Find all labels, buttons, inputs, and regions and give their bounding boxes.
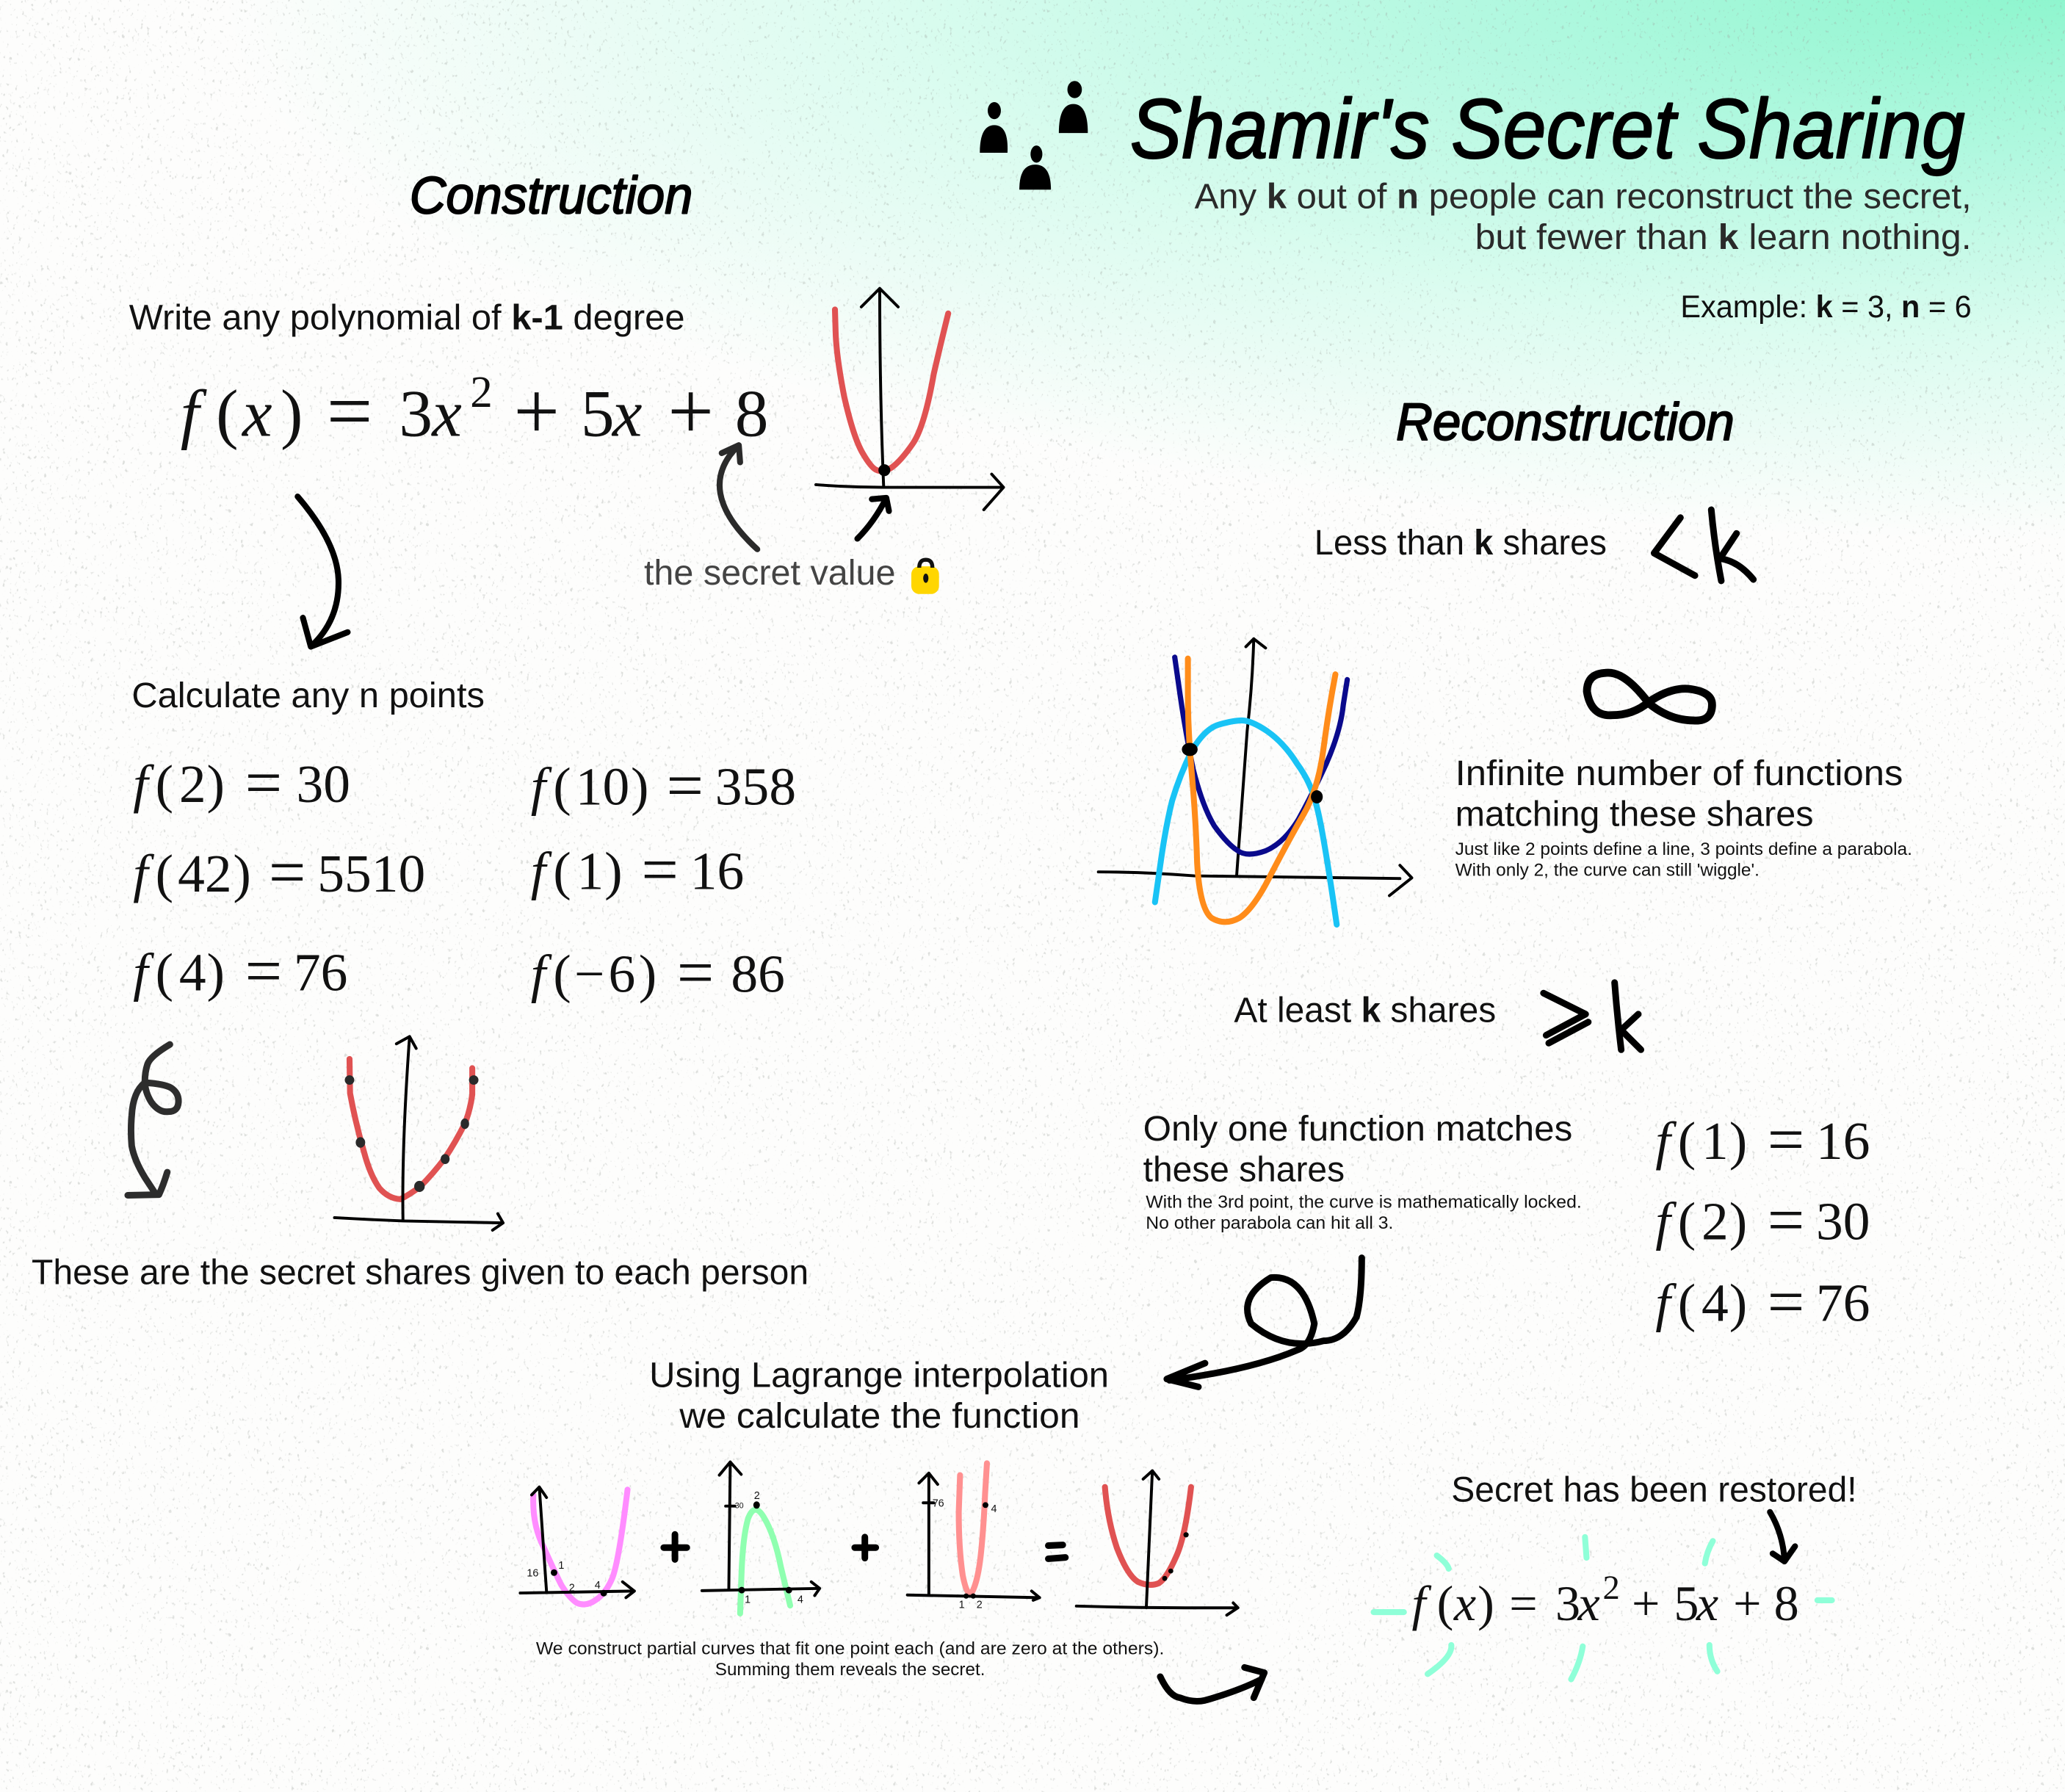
chart: partial curve one: 1 bbox=[558, 1560, 564, 1572]
chart: partial curve two bbox=[702, 1462, 820, 1614]
heading: reconstruction: Reconstruction bbox=[1396, 393, 1735, 452]
formula: polynomial: ) bbox=[281, 376, 303, 451]
subtitle: but fewer than k learn nothing. bbox=[1475, 217, 1972, 257]
panel: construction bbox=[32, 167, 1004, 1293]
symbol: less than k bbox=[1654, 510, 1754, 581]
formulas: points: 86 bbox=[731, 943, 785, 1003]
decoration: mint sparkle dashes bbox=[1373, 1537, 1832, 1680]
text: less than k shares: Less than k shares bbox=[1314, 523, 1607, 563]
formula: restored polynomial: x bbox=[1577, 1575, 1600, 1631]
formulas: three shares: 1 bbox=[1701, 1110, 1729, 1171]
formula: polynomial: 3 bbox=[399, 376, 433, 451]
formulas: points: f bbox=[133, 942, 154, 1002]
formulas: three shares: ( bbox=[1678, 1273, 1696, 1333]
formulas: three shares: 2 bbox=[1701, 1191, 1729, 1251]
formula: restored polynomial: ( bbox=[1437, 1575, 1453, 1631]
chart: partial curve three: 1 bbox=[959, 1600, 965, 1611]
formula: restored polynomial: 5 bbox=[1674, 1575, 1699, 1631]
note: partial curves bbox=[536, 1639, 1164, 1680]
formulas: points: ( bbox=[156, 754, 173, 814]
formulas: points: f bbox=[531, 943, 552, 1003]
formula: restored polynomial: x bbox=[1696, 1575, 1718, 1631]
formulas: points: 2 bbox=[179, 754, 206, 814]
formulas: points bbox=[133, 747, 796, 1009]
formulas: points: ( bbox=[156, 942, 173, 1002]
formulas: three shares: = bbox=[1768, 1104, 1804, 1177]
chart: partial curve three bbox=[908, 1463, 1040, 1611]
note: partial curves: We construct partial curves that fit one point each (and are zero at the others). bbox=[536, 1639, 1164, 1658]
chart: partial curve one bbox=[520, 1487, 634, 1605]
arrow: to secret value on chart bbox=[857, 498, 889, 538]
formulas: points: 76 bbox=[294, 942, 347, 1002]
text: one function bbox=[1143, 1109, 1572, 1190]
formula: restored polynomial: + bbox=[1733, 1575, 1761, 1631]
formulas: points: ) bbox=[604, 841, 623, 901]
formula: polynomial: x bbox=[241, 376, 272, 451]
formulas: three shares: 16 bbox=[1816, 1110, 1870, 1171]
formulas: points: f bbox=[133, 754, 154, 814]
formula: restored polynomial: 3 bbox=[1555, 1575, 1580, 1631]
chart: partial curve two: 30 bbox=[735, 1501, 744, 1510]
formulas: points: = bbox=[269, 837, 305, 909]
formula: polynomial: x bbox=[430, 376, 462, 451]
formulas: points: f bbox=[531, 841, 552, 901]
note: wiggle bbox=[1455, 839, 1912, 881]
text: one function: these shares bbox=[1143, 1150, 1345, 1190]
chart: many parabolas through two points bbox=[1099, 639, 1411, 925]
formula: polynomial: f bbox=[181, 376, 207, 451]
formulas: three shares: f bbox=[1655, 1191, 1677, 1251]
text: infinite functions: Infinite number of functions bbox=[1455, 754, 1903, 793]
chart: partial curve two: 4 bbox=[798, 1594, 803, 1606]
chart: parabola with secret value bbox=[816, 289, 1004, 510]
formula: polynomial: 5 bbox=[581, 376, 615, 451]
chart: partial curve three: 76 bbox=[933, 1498, 944, 1510]
formulas: points: ) bbox=[639, 943, 657, 1003]
label: the secret value: the secret value bbox=[644, 553, 895, 593]
formula: restored polynomial: 8 bbox=[1774, 1575, 1799, 1631]
chart: partial curve two: 2 bbox=[754, 1490, 760, 1502]
text: secret restored: Secret has been restored! bbox=[1451, 1470, 1857, 1509]
formula: polynomial: ( bbox=[216, 376, 239, 451]
formulas: points: 6 bbox=[609, 943, 635, 1003]
formula: polynomial: x bbox=[611, 376, 643, 451]
formulas: three shares: 30 bbox=[1816, 1191, 1870, 1251]
text: calculate n points: Calculate any n points bbox=[131, 676, 485, 715]
panel: reconstruction bbox=[1099, 393, 1912, 1387]
chart: partial curve one: 4 bbox=[595, 1580, 601, 1592]
symbol: equals bbox=[1049, 1545, 1066, 1558]
formula: restored polynomial: 2 bbox=[1603, 1569, 1620, 1607]
formulas: points: = bbox=[677, 936, 714, 1009]
subtitle: Any k out of n people can reconstruct the secret, bbox=[1195, 176, 1972, 216]
formulas: three shares: f bbox=[1655, 1273, 1677, 1333]
formulas: points: = bbox=[245, 935, 282, 1008]
formulas: points: ( bbox=[553, 943, 571, 1003]
formula: restored polynomial: ) bbox=[1478, 1575, 1494, 1631]
formulas: points: = bbox=[641, 834, 679, 906]
formula: polynomial: + bbox=[668, 366, 714, 457]
panel: secret restored bbox=[1373, 1470, 1857, 1680]
arrow: loop to lagrange bbox=[1167, 1258, 1361, 1387]
note: locked curve bbox=[1146, 1193, 1582, 1233]
formulas: points: = bbox=[666, 749, 704, 822]
formulas: points: ) bbox=[207, 942, 225, 1002]
formulas: three shares: = bbox=[1768, 1265, 1804, 1338]
heading: lagrange bbox=[649, 1355, 1109, 1436]
symbol: plus bbox=[664, 1534, 687, 1559]
formulas: three shares: ) bbox=[1729, 1110, 1747, 1171]
formulas: three shares: ) bbox=[1729, 1191, 1747, 1251]
formulas: three shares: ) bbox=[1729, 1273, 1747, 1333]
symbol: at least k bbox=[1544, 983, 1641, 1049]
icon: infinity bbox=[1587, 673, 1712, 720]
formulas: points: ( bbox=[553, 756, 571, 817]
formulas: points: ( bbox=[156, 843, 173, 903]
note: wiggle: Just like 2 points define a line, 3 points define a parabola. bbox=[1455, 839, 1912, 859]
formulas: three shares: = bbox=[1768, 1184, 1804, 1257]
text: secret shares: These are the secret shares given to each person bbox=[32, 1253, 809, 1293]
formulas: three shares bbox=[1655, 1104, 1870, 1338]
text: infinite functions bbox=[1455, 754, 1903, 834]
note: locked curve: No other parabola can hit all 3. bbox=[1146, 1213, 1393, 1233]
formulas: points: ) bbox=[631, 756, 649, 817]
formulas: three shares: 4 bbox=[1701, 1273, 1729, 1333]
formulas: three shares: f bbox=[1655, 1110, 1677, 1171]
formulas: points: 10 bbox=[576, 756, 629, 817]
arrow: down to points bbox=[297, 496, 347, 647]
chart: partial curve three: 2 bbox=[977, 1600, 983, 1611]
formulas: points: 16 bbox=[690, 841, 744, 901]
chart: partial curve two: 1 bbox=[745, 1594, 751, 1606]
chart: summed parabola bbox=[1077, 1471, 1238, 1615]
note: wiggle: With only 2, the curve can still 'wiggle'. bbox=[1455, 861, 1760, 881]
formula: restored polynomial: = bbox=[1509, 1575, 1538, 1631]
formulas: points: 358 bbox=[715, 756, 796, 817]
formulas: points: 30 bbox=[297, 754, 350, 814]
formulas: points: f bbox=[531, 756, 552, 817]
text: write polynomial: Write any polynomial of k-1 degree bbox=[129, 297, 685, 337]
subtitle bbox=[1195, 176, 1972, 257]
arrow: loop down bbox=[128, 1044, 178, 1195]
formulas: points: = bbox=[245, 747, 282, 820]
symbol: plus bbox=[855, 1537, 876, 1558]
chart: partial curve one: 2 bbox=[569, 1582, 575, 1594]
formulas: points: 42 bbox=[178, 843, 232, 903]
example parameters: Example: k = 3, n = 6 bbox=[1680, 289, 1972, 325]
chart: parabola with six points bbox=[335, 1036, 503, 1230]
formulas: points: 1 bbox=[576, 841, 604, 901]
formulas: points: f bbox=[133, 843, 154, 903]
title: Shamir's Secret Sharing bbox=[1130, 82, 1965, 176]
formulas: points: ( bbox=[553, 841, 571, 901]
chart: partial curve one: 16 bbox=[527, 1568, 538, 1580]
formulas: three shares: ( bbox=[1678, 1191, 1696, 1251]
text: infinite functions: matching these shares bbox=[1455, 794, 1813, 834]
note: locked curve: With the 3rd point, the curve is mathematically locked. bbox=[1146, 1193, 1582, 1213]
formula: polynomial: 2 bbox=[470, 368, 493, 417]
text: at least k shares: At least k shares bbox=[1234, 991, 1496, 1030]
formula: restored polynomial: f bbox=[1411, 1575, 1431, 1631]
icon: three people bbox=[980, 81, 1088, 189]
formula: polynomial: = bbox=[327, 366, 372, 457]
formula: polynomial: + bbox=[513, 366, 560, 457]
formulas: points: ) bbox=[207, 754, 225, 814]
formula: restored polynomial: + bbox=[1632, 1575, 1660, 1631]
formulas: points: 5510 bbox=[317, 843, 425, 903]
heading: construction: Construction bbox=[410, 167, 692, 225]
heading: lagrange: we calculate the function bbox=[679, 1396, 1080, 1436]
icon: lock bbox=[911, 560, 939, 594]
note: partial curves: Summing them reveals the secret. bbox=[715, 1660, 985, 1680]
formula: polynomial: 8 bbox=[735, 376, 768, 451]
arrow: to restored secret bbox=[1160, 1667, 1265, 1701]
arrow: to constant bbox=[1770, 1512, 1795, 1561]
formulas: points: 4 bbox=[179, 942, 206, 1002]
formulas: points: ) bbox=[233, 843, 251, 903]
chart: partial curve three: 4 bbox=[991, 1503, 997, 1515]
header bbox=[980, 81, 1972, 325]
formula: restored polynomial: x bbox=[1453, 1575, 1476, 1631]
heading: lagrange: Using Lagrange interpolation bbox=[649, 1355, 1109, 1395]
arrow: to constant term bbox=[720, 445, 757, 549]
formulas: three shares: ( bbox=[1678, 1110, 1696, 1171]
formulas: three shares: 76 bbox=[1816, 1273, 1870, 1333]
text: one function: Only one function matches bbox=[1143, 1109, 1572, 1149]
formulas: points: − bbox=[574, 943, 604, 1003]
panel: lagrange interpolation bbox=[520, 1355, 1265, 1701]
